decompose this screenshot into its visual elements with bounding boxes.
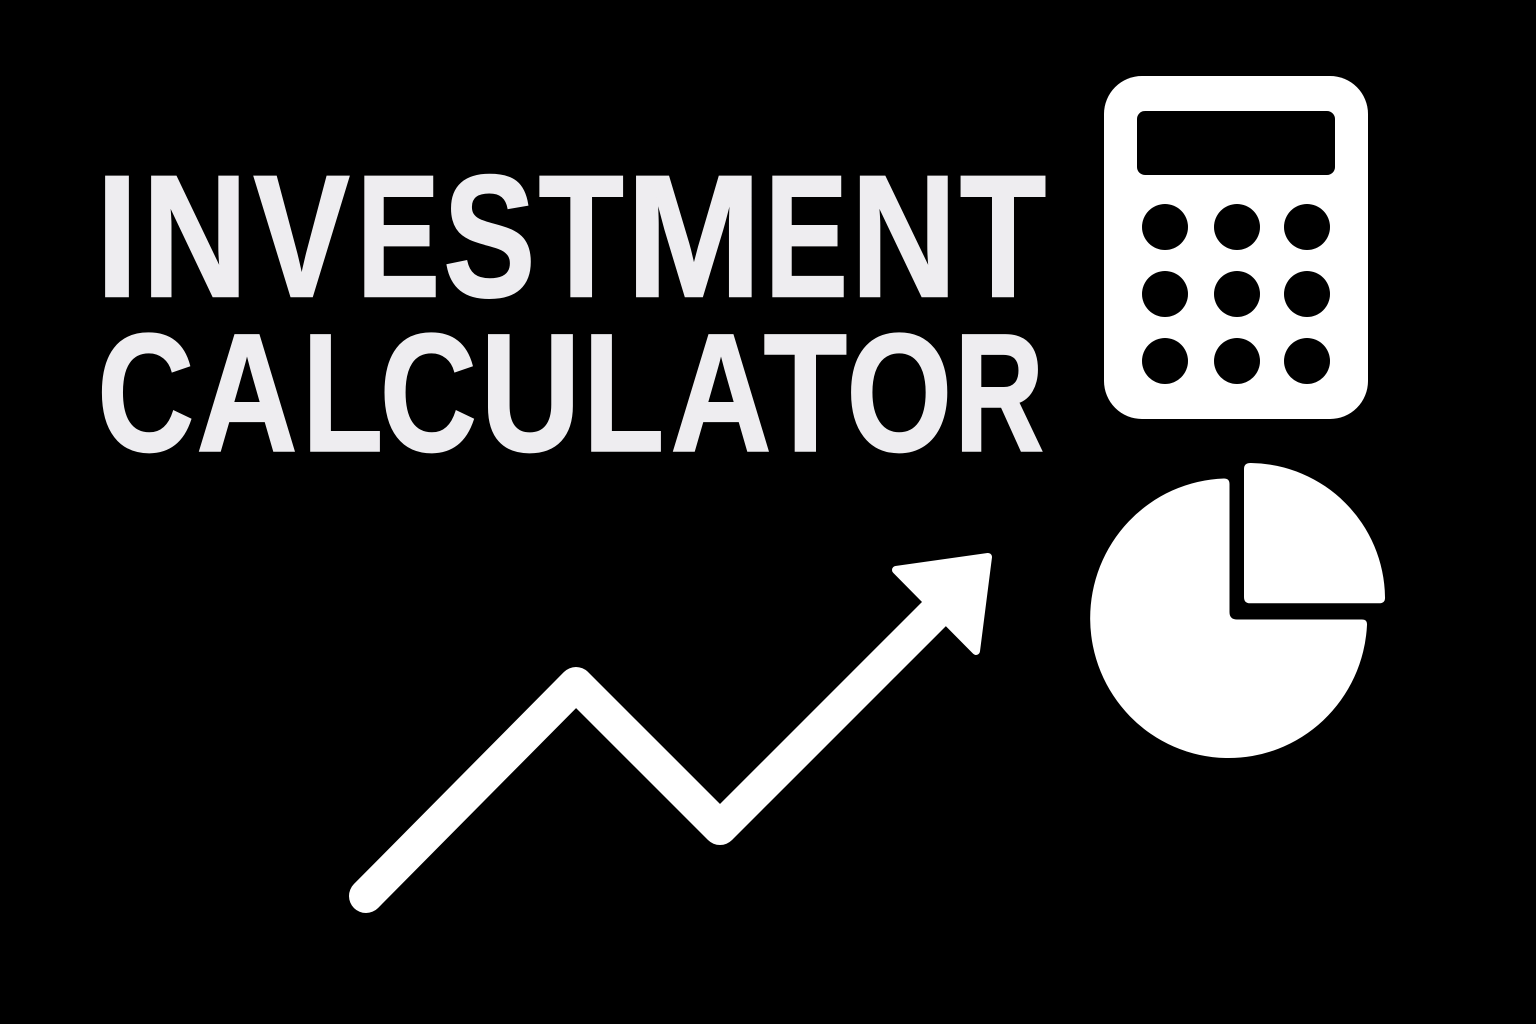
title line: INVESTMENT: T: [539, 138, 624, 333]
title line: INVESTMENT: E: [765, 138, 848, 333]
title line: CALCULATOR: C: [380, 299, 477, 487]
title line: INVESTMENT: E: [357, 138, 440, 333]
icon: calculator: [1104, 76, 1368, 419]
title line: CALCULATOR: C: [97, 299, 194, 487]
title line: INVESTMENT: N: [851, 138, 957, 333]
title line: CALCULATOR: T: [764, 299, 847, 487]
title line: INVESTMENT: V: [253, 138, 350, 333]
title line: CALCULATOR: A: [670, 299, 772, 487]
title: [96, 138, 1046, 487]
title line: CALCULATOR: R: [954, 299, 1044, 487]
title line: CALCULATOR: L: [302, 299, 383, 487]
title line: CALCULATOR: O: [846, 299, 952, 487]
title line: INVESTMENT: N: [142, 138, 248, 333]
icon: pie chart: [1090, 463, 1385, 758]
title line: INVESTMENT: T: [960, 138, 1046, 333]
icon: rising arrow: [366, 557, 988, 896]
title line: CALCULATOR: U: [480, 299, 580, 487]
title line: INVESTMENT: M: [626, 138, 762, 333]
title line: CALCULATOR: A: [196, 299, 298, 487]
title line: INVESTMENT: I: [96, 138, 138, 333]
title line: CALCULATOR: L: [583, 299, 664, 487]
title line: INVESTMENT: S: [443, 138, 535, 333]
